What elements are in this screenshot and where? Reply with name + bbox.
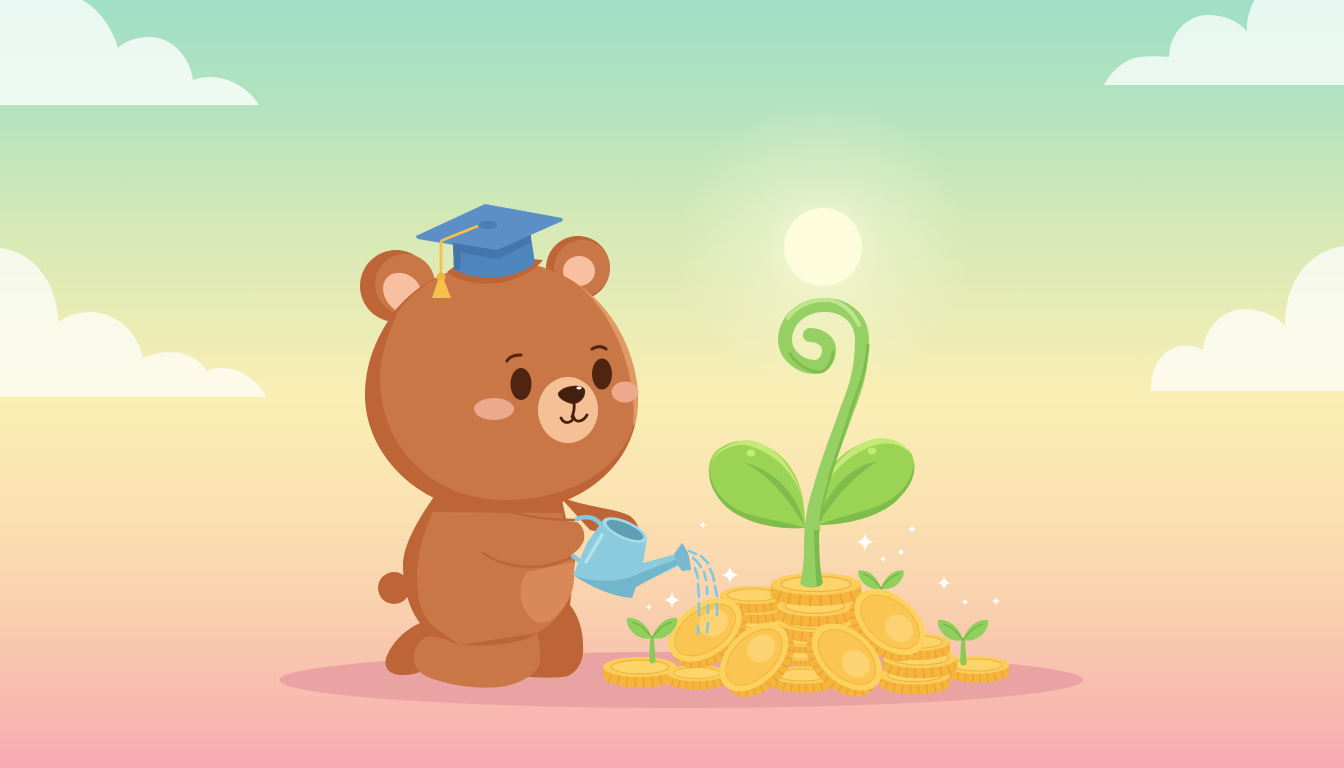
can body shade — [573, 559, 678, 598]
can spout — [633, 554, 680, 588]
sprout: left small — [627, 618, 677, 664]
can body — [573, 520, 647, 598]
cloud: middle right — [1151, 246, 1344, 391]
watering can — [573, 512, 691, 598]
can opening — [599, 512, 651, 548]
sun glow and disc — [673, 97, 973, 397]
bear — [360, 204, 638, 688]
bear near arm — [476, 511, 584, 567]
bear left cheek — [474, 398, 514, 420]
bear nose — [558, 386, 585, 404]
bear left eye — [510, 368, 532, 400]
cloud: top right — [1104, 0, 1344, 85]
tilted coin: front left — [707, 610, 807, 710]
bear arm creases — [483, 511, 574, 567]
sprout left leaf — [709, 440, 805, 528]
cloud: middle left — [0, 248, 266, 397]
bear eyebrows — [507, 347, 606, 361]
sprout: behind coins — [858, 570, 904, 611]
bear tail — [378, 572, 410, 604]
sprout: right small — [938, 620, 988, 666]
bear thigh and foot — [414, 633, 540, 688]
bear mouth — [561, 403, 587, 422]
coins: left stack — [720, 586, 792, 656]
sprout curling stem — [785, 300, 868, 530]
can handle — [573, 517, 602, 563]
bear right cheek — [612, 382, 638, 402]
graduation cap — [416, 204, 563, 298]
can rose head — [674, 543, 691, 571]
cap shadow on head — [447, 258, 543, 284]
bear body silhouette — [385, 498, 583, 678]
bear far arm — [560, 497, 638, 540]
can highlight — [586, 535, 602, 562]
sparkles — [646, 521, 1000, 610]
sprout right leaf — [818, 438, 914, 525]
sprout stem base — [800, 478, 828, 588]
big sprout — [709, 300, 914, 588]
water drops — [689, 551, 717, 634]
coins: center stack — [771, 573, 861, 693]
tilted coin: far right — [837, 576, 938, 674]
bear right ear — [546, 236, 610, 300]
bear head — [365, 258, 638, 513]
cap tassel — [432, 226, 478, 298]
bear right eye — [592, 358, 612, 390]
cloud: top left — [0, 0, 259, 105]
coins: right stack — [880, 633, 1009, 694]
ground shadow ellipse — [279, 652, 1083, 708]
coin pile — [603, 570, 1009, 710]
bear torso front — [417, 512, 574, 645]
tilted coin: front right — [794, 610, 895, 710]
bear left ear — [360, 250, 435, 322]
bear belly patch — [520, 562, 574, 623]
coins: ground left — [603, 657, 727, 690]
tilted coin: far left — [657, 585, 758, 681]
bear muzzle — [538, 377, 598, 443]
